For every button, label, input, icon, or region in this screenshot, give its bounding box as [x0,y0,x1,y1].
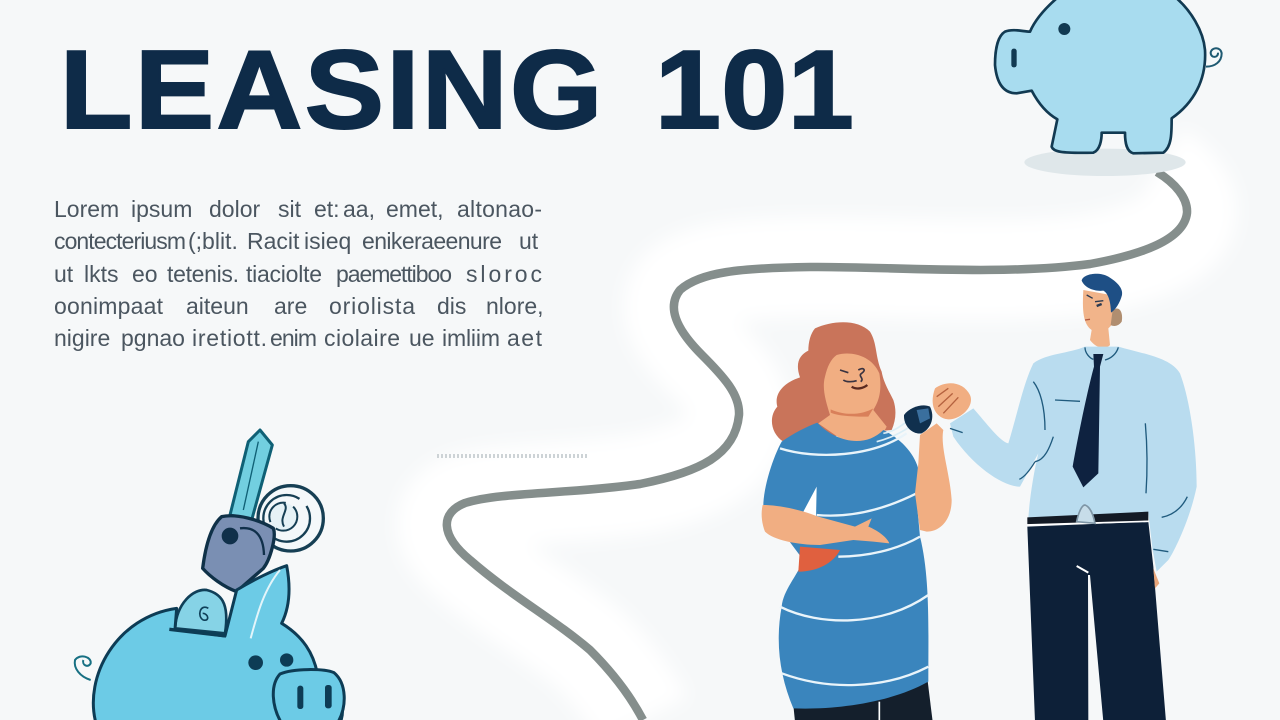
ear highlight [251,570,280,638]
belt [1027,512,1148,526]
man's hair [1082,274,1122,313]
body text block: aiteun [186,293,249,319]
body text block: nigire [54,325,110,351]
tail [1206,48,1222,67]
man's neck and head [1083,290,1118,348]
body text block [54,196,544,351]
pig body [93,566,342,720]
finger lines [937,388,958,413]
body text block: ut [54,261,74,287]
man's shirt [950,347,1197,572]
body text block: oriolista [329,293,415,319]
body text block: nlore, [486,293,544,319]
tail [75,656,91,680]
body text block: dis [437,293,466,319]
icon: top piggy bank [995,0,1222,176]
body text block: eo [132,261,158,287]
body text block: contecteriusm [54,228,186,254]
body text block: sit [278,196,302,222]
body text block: enim [270,325,317,351]
body text block: oonimpaat [54,293,164,319]
man's back hair [1111,308,1122,326]
woman's raised arm [915,423,952,532]
body text block: enikeraeenure [362,228,502,254]
eyes [248,653,293,670]
chin shadow [831,408,873,417]
woman's forearm and hand [762,505,889,545]
dress stripes [780,433,928,685]
body text block: dolor [209,196,260,222]
snout [273,670,344,720]
icon: bottom piggy bank with key and coin [75,430,344,720]
body text block: tiaciolte [246,261,322,287]
title: 101 [655,29,854,152]
body text block: Lorem [54,196,119,222]
body text block: paemettiboo [336,261,452,287]
piggy bank shadow [1024,149,1186,176]
nostril [1011,49,1017,67]
body text block: ue [409,325,435,351]
woman's face and neck [818,353,887,443]
body text block: altonao- [457,196,542,222]
body text block: imliim [442,325,500,351]
nostrils [297,685,332,709]
man [933,274,1197,720]
illustration: woman and man exchanging key [762,274,1197,720]
face details [840,369,867,388]
slot [169,629,226,636]
body text block: isieq [304,228,351,254]
woman [762,322,952,720]
man's hand holding key [933,383,971,419]
small coin in slot [175,590,226,633]
woman's striped dress [763,423,928,709]
sleeve gap [803,487,817,518]
title: LEASING [60,29,602,152]
body text block: tetenis. [167,261,239,287]
body text block: aet [507,325,543,351]
car key [877,405,932,442]
body text block: sloroc [466,261,542,287]
scarf shadow [798,547,840,572]
man's trousers [1027,522,1166,720]
key head [203,516,274,592]
woman's hair [772,322,895,442]
body text block: lkts [84,261,118,287]
necktie [1073,354,1103,487]
body text block: Racit [247,228,300,254]
pig body [995,0,1205,153]
body text block: aa, [343,196,375,222]
winding path [447,172,1187,720]
body text block: emet, [386,196,444,222]
body text block: ciolaire [324,325,400,351]
shirt folds [950,347,1187,552]
body text block: ut [519,228,539,254]
body text block: are [274,293,307,319]
spiral coin [258,486,323,551]
belt buckle [1077,505,1095,523]
body text block: ipsum [131,196,192,222]
body text block: iretiott. [192,325,267,351]
body text block: et: [314,196,340,222]
key blade [230,430,272,520]
man's hand behind leg [1153,568,1159,588]
body text block: pgnao [121,325,185,351]
title [60,29,854,152]
body text block: (;blit. [188,228,238,254]
woman's trousers [793,678,933,720]
eye [1058,23,1070,35]
man's face details [1085,295,1103,320]
